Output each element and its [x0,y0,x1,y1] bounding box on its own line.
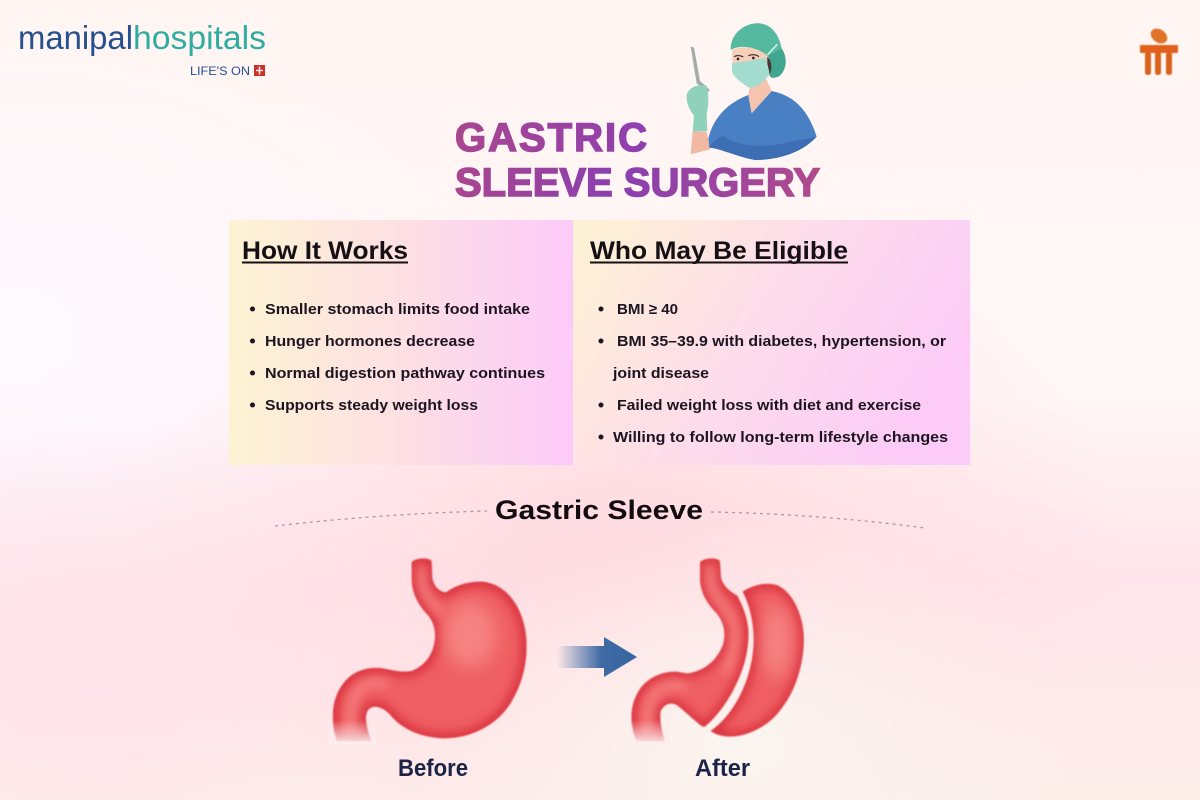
logo: manipal hospitals: hospitals [133,19,266,56]
removed stomach section [711,584,804,737]
logo: manipal hospitals: manipal [18,19,133,56]
face mask [732,58,769,87]
panel: how it works [229,220,573,465]
illustration: stomach after [628,558,804,745]
arrow: before to after [557,637,637,677]
eyes and brows [734,55,759,57]
list: how it works bullets [250,301,545,414]
list: eligibility bullets: BMI 35–39.9 with diabetes, hypertension, or [617,333,946,350]
label: after: After [695,755,750,782]
panel: who may be eligible [573,220,970,465]
hair at ear [767,57,772,75]
list: how it works bullets: Normal digestion pathway continues [265,365,545,382]
icon: surgeon with scalpel [687,23,817,160]
list: how it works bullets: Hunger hormones decrease [265,333,475,350]
list: eligibility bullets: Failed weight loss with diet and exercise [617,397,921,414]
gloved hand [687,85,708,132]
heading: gastric sleeve [275,495,925,528]
logo: manipal hospitals [18,19,266,78]
heading: how it works: How It Works [242,237,408,265]
list: how it works bullets: Supports steady weight loss [265,397,478,414]
scalpel [691,47,710,92]
icon: MAHE emblem [1140,26,1178,75]
scrub top [708,91,817,160]
list: how it works bullets: Smaller stomach limits food intake [265,301,530,318]
title: GASTRIC [455,116,647,160]
heading: gastric sleeve: Gastric Sleeve [495,495,703,525]
sleeve pouch [631,558,749,742]
title: SLEEVE SURGERY [455,161,820,205]
face [732,47,771,83]
surgical cap [731,23,782,56]
list: eligibility bullets [598,301,948,446]
list: eligibility bullets: Willing to follow long-term lifestyle changes [613,429,948,446]
list: eligibility bullets: BMI ≥ 40 [617,301,678,318]
bare forearm [691,132,710,154]
title [455,116,820,205]
illustration: stomach before [328,558,527,745]
list: eligibility bullets: joint disease [612,365,709,382]
label: before: Before [398,755,468,782]
heading: who may be eligible: Who May Be Eligible [590,237,848,265]
neck [748,78,772,113]
logo: manipal hospitals: LIFE'S ON [190,66,250,78]
